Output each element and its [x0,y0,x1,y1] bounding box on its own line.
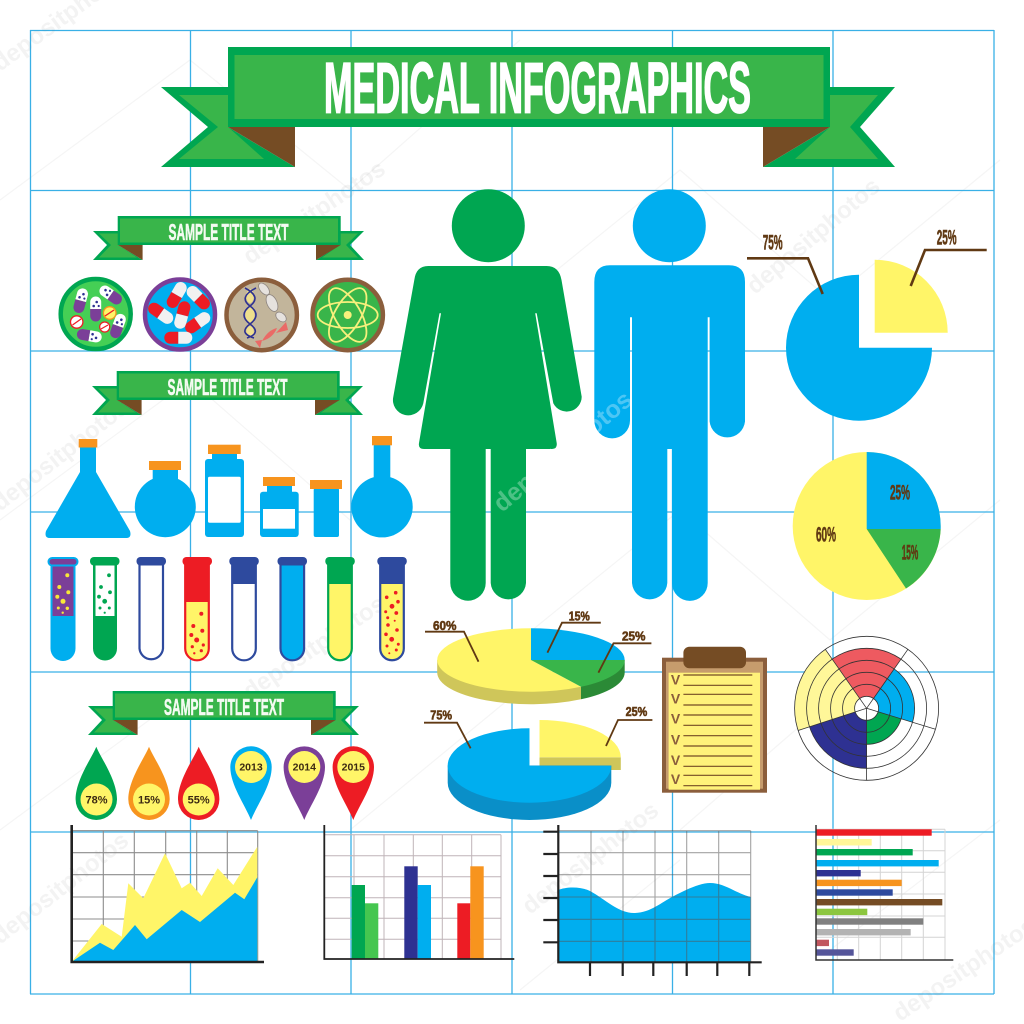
tube 7: green and yellow [325,557,355,660]
pin marker 2014 [284,746,325,820]
pie chart: 60 25 15: 15% [902,541,918,564]
3D pie chart: 60 25 15: 25% [622,630,646,644]
3D pie chart: 75 25: 75% [430,708,452,722]
drop marker 78% [76,747,117,820]
petri dish: capsules on blue [145,280,215,350]
petri dish: pills on green [61,279,131,349]
pie chart: 75% and 25% exploded: 75% [763,231,783,254]
clipboard checklist: V [671,732,681,748]
drop marker 55% [178,747,219,820]
3D pie chart: 75 25 [424,705,652,820]
tube 2: green [90,557,120,660]
tube 6: blue [278,557,307,660]
radar chart [795,636,939,780]
bar chart [324,825,514,959]
3D pie chart: 60 25 15: 15% [569,610,590,624]
section ribbon 1 [93,216,364,260]
man figure [594,189,745,601]
pin marker 2015: 2015 [342,762,365,774]
clipboard checklist [664,647,765,791]
wave area chart [543,825,762,976]
pie chart: 75% and 25% exploded: 25% [937,226,957,249]
pin marker 2014: 2014 [293,762,316,774]
section ribbon 3 [88,691,359,735]
horizontal bar chart [816,825,953,960]
pin marker 2013: 2013 [239,762,263,774]
drop marker 55%: 55% [188,794,210,806]
pie chart: 75% and 25% exploded [747,226,987,421]
3D pie chart: 75 25: 25% [626,705,647,719]
lab flasks and bottles [46,436,413,538]
tube 5: navy and white [229,557,259,660]
tube 3: empty [136,557,166,659]
watermark text: depositphotos [238,155,390,270]
watermark on figures: depositphotos [488,385,638,518]
pie chart: 60 25 15: 60% [816,524,836,547]
petri dish: atom [312,280,383,350]
watermark text: depositphotos [517,797,664,920]
3D pie chart: 60 25 15 [425,610,651,704]
section ribbon 3: SAMPLE TITLE TEXT [164,694,284,720]
area chart [72,825,264,962]
section ribbon 2 [92,371,363,415]
clipboard checklist: V [671,690,681,706]
tube 4: red and yellow [182,557,212,660]
clipboard checklist: V [671,752,681,768]
clipboard checklist: V [671,672,681,688]
clipboard checklist: V [671,710,681,726]
petri dish: DNA [227,280,297,350]
title banner [161,47,895,167]
drop marker 15%: 15% [138,794,160,806]
3D pie chart: 60 25 15: 60% [433,619,456,633]
test tubes [48,557,407,661]
drop marker 15% [128,747,170,820]
pie chart: 60 25 15: 25% [890,481,910,504]
watermark text: depositphotos [238,590,390,705]
section ribbon 1: SAMPLE TITLE TEXT [168,219,288,245]
woman figure [393,189,582,601]
clipboard checklist: V [671,771,681,787]
pin marker 2013 [230,746,272,820]
tube 8: navy and yellow with red dots [377,557,407,660]
pin marker 2015 [333,746,374,820]
pie chart: 60 25 15 [793,452,941,600]
tube 1: purple and blue [48,558,78,661]
drop marker 78%: 78% [85,794,108,806]
section ribbon 2: SAMPLE TITLE TEXT [168,374,288,400]
watermark text: depositphotos [742,173,886,300]
